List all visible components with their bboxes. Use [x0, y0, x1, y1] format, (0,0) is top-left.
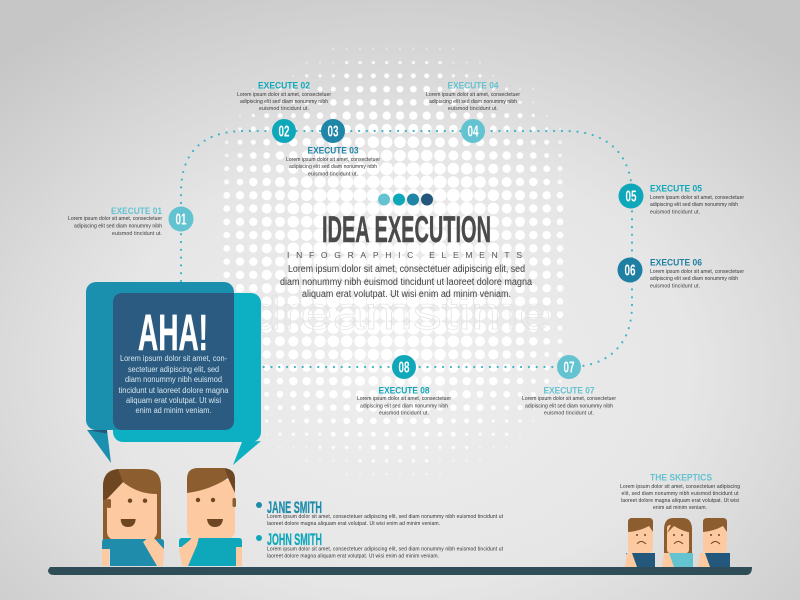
intro text	[280, 264, 532, 300]
step 07: Lorem ipsum dolor sit amet, consectetuer	[522, 396, 616, 402]
halftone dot pattern	[227, 49, 560, 474]
skeptics text	[620, 472, 740, 511]
step 08: EXECUTE 08	[378, 386, 430, 396]
Jane Smith info	[256, 498, 504, 527]
step 03: Lorem ipsum dolor sit amet, consectetuer	[286, 157, 380, 163]
skeptics text: THE SKEPTICS	[650, 472, 712, 482]
step 08: Lorem ipsum dolor sit amet, consectetuer	[357, 396, 451, 402]
step 04: adipiscing elit sed diam nonummy nibh	[429, 99, 517, 105]
aha text: aliquam erat volutpat. Ut wisi	[126, 396, 221, 405]
step 05: 05	[626, 188, 637, 206]
skeptic: right man	[698, 518, 730, 567]
step 08: euismod tincidunt ut.	[379, 410, 429, 416]
Jane Smith info: JANE SMITH	[267, 498, 322, 517]
aha text	[118, 354, 229, 415]
aha text: enim ad minim veniam.	[136, 406, 212, 415]
step 07: 07	[564, 360, 575, 376]
John Smith info: JOHN SMITH	[267, 530, 322, 549]
step 06: EXECUTE 06	[650, 258, 702, 268]
step 05	[618, 184, 744, 216]
step 04: 04	[468, 124, 479, 140]
step 02: 02	[278, 124, 290, 140]
step 05: Lorem ipsum dolor sit amet, consectetuer	[650, 195, 744, 201]
step 01: euismod tincidunt ut.	[112, 231, 162, 237]
skeptic: left man	[625, 518, 655, 567]
step 05: EXECUTE 05	[650, 184, 702, 194]
skeptics text: elit, sed diam nonummy nibh euismod tincidunt ut	[622, 491, 739, 497]
step 03: EXECUTE 03	[308, 146, 358, 156]
step 05: euismod tincidunt ut.	[650, 210, 700, 216]
skeptic: center woman	[662, 518, 693, 567]
step 02	[237, 80, 331, 143]
aha text: Lorem ipsum dolor sit amet, con-	[120, 354, 227, 363]
step 02: adipiscing elit sed diam nonummy nibh	[240, 99, 328, 105]
step 02: Lorem ipsum dolor sit amet, consectetuer	[237, 92, 331, 98]
aha heading: AHA!	[138, 304, 208, 361]
aha text: diam nonummy nibh euismod	[125, 375, 222, 384]
skeptics text: Lorem ipsum dolor sit amet, consectetuer adipiscing	[620, 484, 740, 490]
subtitle: INFOGRAPHIC ELEMENTS	[287, 250, 522, 260]
step 04: Lorem ipsum dolor sit amet, consectetuer	[426, 92, 520, 98]
step 06: adipiscing elit sed diam nonummy nibh	[650, 276, 738, 282]
step 08: adipiscing elit sed diam nonummy nibh	[360, 404, 448, 410]
step 06: 06	[624, 262, 636, 280]
John Smith info: laoreet dolore magna aliquam erat volutpat. Ut wisi enim ad minim veniam.	[267, 554, 439, 560]
step 05: adipiscing elit sed diam nonummy nibh	[650, 202, 738, 208]
color dots	[378, 194, 433, 206]
step 03: euismod tincidunt ut.	[308, 172, 358, 178]
step 06	[618, 258, 744, 290]
step 06: euismod tincidunt ut.	[650, 284, 700, 290]
step 01: EXECUTE 01	[111, 206, 162, 216]
step 01: Lorem ipsum dolor sit amet, consectetuer	[68, 216, 162, 222]
step 02: euismod tincidunt ut.	[259, 106, 309, 112]
step 01: 01	[176, 212, 187, 228]
Jane Smith info: Lorem ipsum dolor sit amet, consectetuer adipiscing elit, sed diam nonummy nibh euismod tincidunt ut	[267, 514, 504, 520]
person: John	[179, 468, 242, 566]
intro text: Lorem ipsum dolor sit amet, consectetuer adipiscing elit, sed	[288, 264, 525, 275]
step 04: EXECUTE 04	[448, 80, 498, 90]
step 07: adipiscing elit sed diam nonummy nibh	[525, 404, 613, 410]
skeptics text: enim ad minim veniam.	[653, 505, 707, 511]
step 06: Lorem ipsum dolor sit amet, consectetuer	[650, 269, 744, 275]
step 03: adipiscing elit sed diam nonummy nibh	[289, 164, 377, 170]
intro text: diam nonummy nibh euismod tincidunt ut laoreet dolore magna	[280, 277, 532, 288]
floor bar	[48, 567, 752, 575]
aha text: tincidunt ut laoreet dolore magna	[118, 386, 229, 395]
watermark: dreamstime	[249, 287, 551, 339]
person: Jane	[102, 469, 164, 566]
step 08: 08	[398, 360, 410, 376]
aha text: sectetuer adipiscing elit, sed	[128, 365, 219, 374]
Jane Smith info: laoreet dolore magna aliquam erat volutpat. Ut wisi enim ad minim veniam.	[267, 521, 440, 527]
step 03	[286, 119, 380, 178]
skeptics text: laoreet dolore magna aliquam erat volutpat. Ut wisi	[621, 498, 739, 504]
step 01: adipiscing elit sed diam nonummy nibh	[74, 224, 162, 230]
step 03: 03	[328, 124, 339, 140]
dotted timeline path	[181, 131, 632, 367]
step 02: EXECUTE 02	[258, 80, 310, 90]
title: IDEA EXECUTION	[322, 209, 491, 250]
speech bubbles	[86, 282, 261, 465]
step 08	[357, 355, 451, 416]
intro text: aliquam erat volutpat. Ut wisi enim ad minim veniam.	[302, 289, 511, 300]
step 07: EXECUTE 07	[544, 386, 594, 396]
step 04: euismod tincidunt ut.	[448, 106, 498, 112]
step 01	[68, 206, 194, 237]
step 04	[426, 80, 520, 143]
step 07: euismod tincidunt ut.	[544, 410, 594, 416]
John Smith info	[256, 530, 504, 560]
step 07	[522, 355, 616, 416]
John Smith info: Lorem ipsum dolor sit amet, consectetuer adipiscing elit, sed diam nonummy nibh euismod tincidunt ut	[267, 546, 504, 552]
